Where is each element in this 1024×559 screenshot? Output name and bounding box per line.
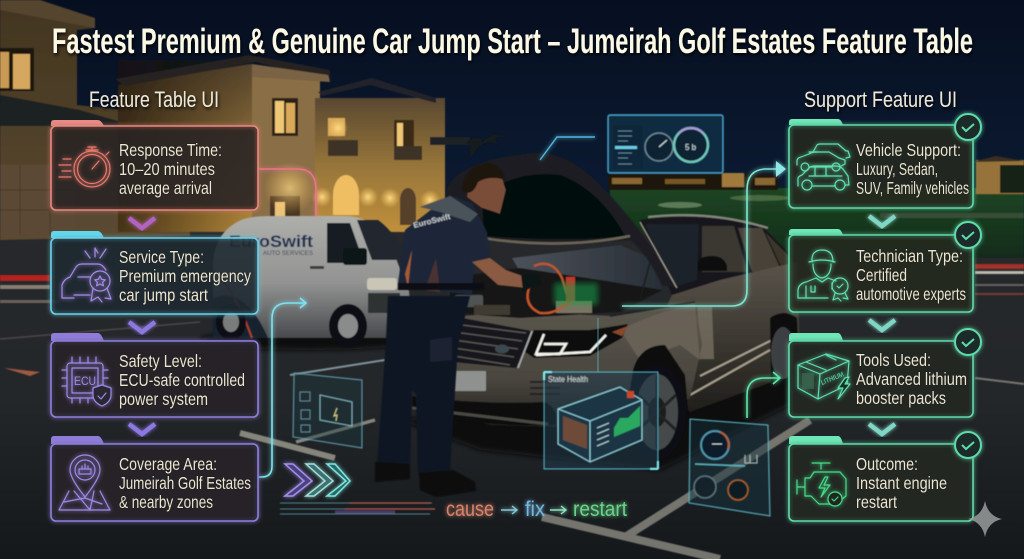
chevron bbox=[129, 322, 155, 332]
text: service type: Service Type: bbox=[119, 247, 204, 267]
text: coverage area bbox=[119, 454, 251, 512]
icon: check badge bbox=[955, 222, 981, 248]
left house bbox=[0, 0, 190, 240]
icon: engine check bbox=[797, 463, 846, 506]
text: technician type: Technician Type: bbox=[856, 246, 963, 266]
data streaks bbox=[280, 503, 435, 514]
hud: top diagnostics screen: 5 b bbox=[685, 143, 697, 152]
panel: response time bbox=[51, 120, 258, 210]
front fascia bbox=[415, 302, 702, 430]
chevron bbox=[869, 424, 895, 434]
car shadow bbox=[400, 370, 790, 470]
hud: battery state of health: State Health bbox=[548, 374, 588, 384]
mechanic bbox=[375, 163, 541, 497]
connector: coverage area to van bbox=[258, 298, 306, 477]
icon: vehicles bbox=[797, 144, 850, 190]
arrow head: vehicle support bbox=[776, 161, 786, 177]
text: response time: 10–20 minutes bbox=[119, 159, 215, 179]
text: coverage area: & nearby zones bbox=[119, 492, 213, 512]
grille bbox=[452, 316, 532, 368]
chevron bbox=[869, 320, 895, 330]
icon: lithium battery bbox=[798, 354, 850, 399]
road lines and light trails bbox=[0, 264, 1024, 559]
hud: top diagnostics screen bbox=[608, 115, 723, 173]
chevron bbox=[129, 424, 155, 434]
connector: battery to engine bbox=[597, 318, 599, 372]
panel: vehicle support bbox=[789, 114, 981, 208]
text: safety level bbox=[119, 351, 245, 409]
van logo: EuroSwift bbox=[229, 232, 313, 251]
text: technician type: Certified bbox=[856, 265, 907, 285]
icon: premium car bbox=[62, 248, 111, 302]
panel: coverage area bbox=[51, 436, 258, 521]
text: vehicle support: Vehicle Support: bbox=[856, 140, 961, 160]
text: technician type: automotive experts bbox=[856, 284, 966, 304]
text: outcome: Instant engine bbox=[856, 473, 947, 493]
icon: stopwatch bbox=[59, 147, 110, 187]
icon: check badge bbox=[955, 329, 981, 355]
trousers bbox=[377, 296, 470, 474]
golf course bbox=[608, 156, 1024, 266]
panel: technician type bbox=[789, 222, 981, 312]
connector: engine to vehicle support bbox=[622, 169, 778, 306]
hud: left battery screen bbox=[293, 373, 362, 448]
text: tools used bbox=[856, 350, 967, 408]
delivery van bbox=[213, 216, 412, 348]
text: vehicle support: Luxury, Sedan, bbox=[856, 159, 938, 179]
tagline: cause fix restart: fix bbox=[525, 498, 545, 521]
road surface bbox=[0, 232, 1024, 559]
text: response time: average arrival bbox=[119, 178, 212, 198]
head bbox=[467, 178, 506, 214]
text: outcome: restart bbox=[856, 492, 897, 512]
text: safety level: Safety Level: bbox=[119, 351, 202, 371]
central villa bbox=[115, 55, 506, 232]
icon: ecu chip with shield: ECU bbox=[74, 374, 96, 388]
text: vehicle support bbox=[856, 140, 969, 198]
icon: ecu chip with shield bbox=[62, 357, 111, 406]
sparkle watermark bbox=[968, 501, 1002, 537]
connector: response time to van bbox=[258, 169, 316, 216]
chevrons: progress arrows bbox=[285, 464, 350, 496]
tagline: cause fix restart: restart bbox=[573, 498, 627, 521]
text: service type bbox=[119, 247, 251, 305]
front wheel bbox=[625, 345, 688, 465]
panel: service type bbox=[51, 231, 258, 314]
boots bbox=[375, 462, 476, 497]
delivery van: AUTO SERVICES bbox=[263, 250, 314, 257]
connector: gauges to tools used bbox=[747, 372, 780, 418]
text: response time bbox=[119, 140, 222, 198]
mechanic: EuroSwift bbox=[412, 212, 452, 230]
text: coverage area: Coverage Area: bbox=[119, 454, 217, 474]
icon: technician bbox=[798, 250, 848, 301]
text: tools used: booster packs bbox=[856, 388, 946, 408]
tagline: cause fix restart bbox=[446, 498, 627, 521]
panel: tools used bbox=[789, 329, 981, 417]
text: outcome: Outcome: bbox=[856, 454, 918, 474]
side body bbox=[640, 262, 800, 412]
connector: hood to top screen bbox=[540, 137, 595, 160]
rear wheel bbox=[770, 313, 799, 390]
chevron bbox=[869, 216, 895, 226]
text: safety level: power system bbox=[119, 389, 208, 409]
text: service type: car jump start bbox=[119, 285, 208, 305]
icon: lithium battery: LITHIUM bbox=[820, 371, 845, 387]
raised hood bbox=[446, 153, 678, 300]
headlight bbox=[525, 324, 628, 358]
text: safety level: ECU-safe controlled bbox=[119, 370, 245, 390]
hud: battery state of health bbox=[544, 372, 658, 469]
text: service type: Premium emergency bbox=[119, 266, 251, 286]
cabin bbox=[640, 217, 797, 310]
engine bay bbox=[450, 268, 662, 318]
chevron bbox=[129, 218, 155, 228]
panel: outcome bbox=[789, 432, 981, 521]
heading: support feature ui: Support Feature UI bbox=[804, 87, 957, 112]
tagline: cause fix restart: cause bbox=[446, 498, 494, 521]
hud: right gauges bbox=[689, 419, 770, 516]
text: vehicle support: SUV, Family vehicles bbox=[856, 178, 969, 198]
text: tools used: Tools Used: bbox=[856, 350, 931, 370]
icon: map pin bbox=[59, 455, 110, 510]
plate and intake bbox=[452, 371, 486, 391]
windshield below hood bbox=[512, 245, 662, 290]
text: outcome bbox=[856, 454, 947, 512]
heading: feature table ui: Feature Table UI bbox=[89, 87, 219, 112]
icon: check badge bbox=[955, 432, 981, 458]
van shadow bbox=[200, 330, 420, 350]
icon: check badge bbox=[955, 114, 981, 140]
panel: safety level bbox=[51, 333, 258, 417]
text: technician type bbox=[856, 246, 966, 304]
text: response time: Response Time: bbox=[119, 140, 222, 160]
torso bbox=[398, 195, 490, 295]
range rover bbox=[412, 215, 800, 465]
text: tools used: Advanced lithium bbox=[856, 369, 967, 389]
text: coverage area: Jumeirah Golf Estates bbox=[119, 473, 251, 493]
